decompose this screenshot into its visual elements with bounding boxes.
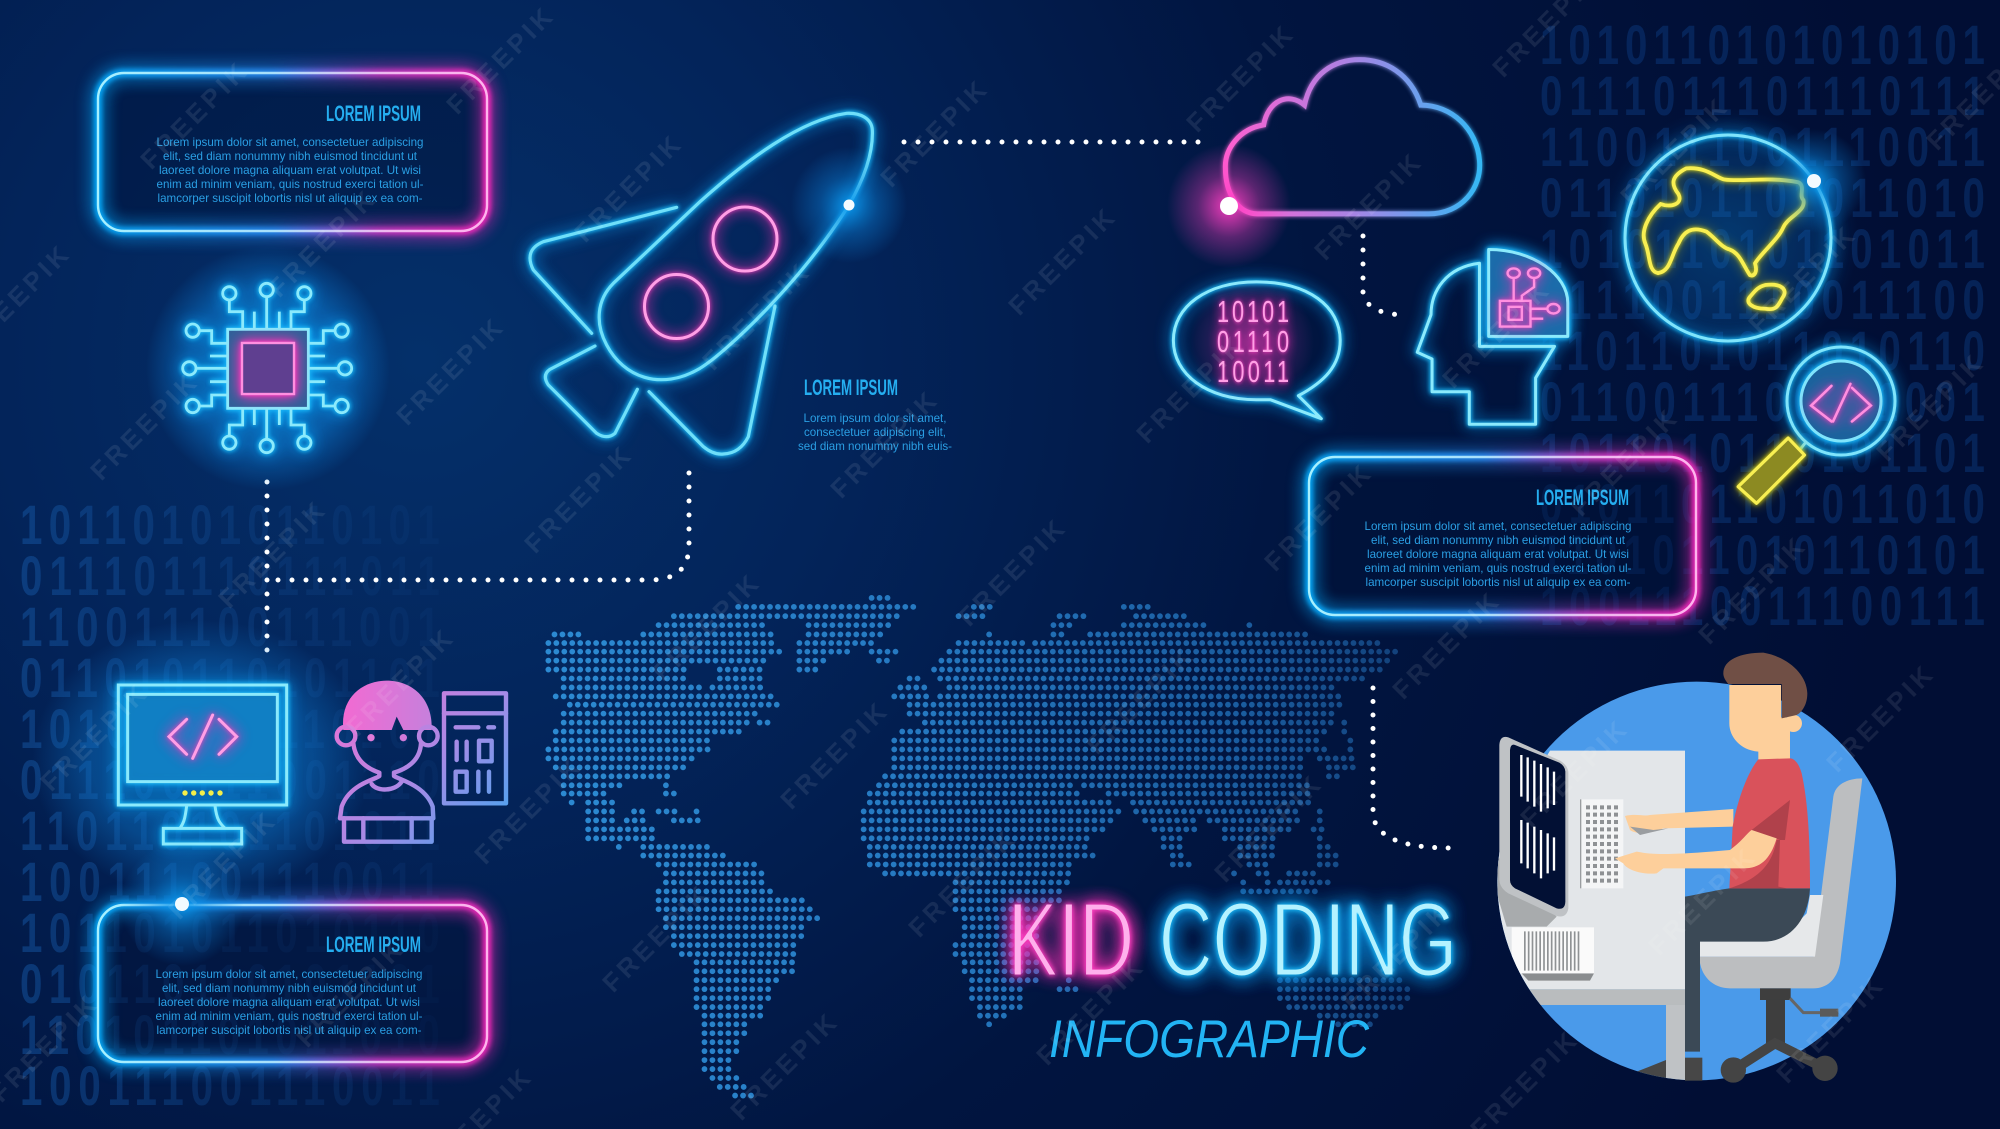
watermarks: FREEPIK [1030, 950, 1151, 1071]
icon: globe [1598, 108, 1866, 368]
binary pattern: lower left: 100111001110011 [20, 852, 440, 914]
panel: bottom left text box [98, 842, 487, 1062]
watermarks: FREEPIK [1436, 273, 1557, 394]
watermarks: FREEPIK [1870, 346, 1991, 467]
panel body text: lamcorper suscipit lobortis nisl ut aliquip ex ea com- [156, 1023, 422, 1037]
watermarks: FREEPIK [568, 127, 689, 248]
panel body text: lamcorper suscipit lobortis nisl ut aliquip ex ea com- [1366, 575, 1630, 589]
subtitle: INFOGRAPHIC: INFOGRAPHIC [1049, 1010, 1370, 1069]
icon: computer monitor [32, 620, 372, 900]
panel body text: Lorem ipsum dolor sit amet, consectetuer adipiscing [1364, 519, 1632, 533]
chair [1699, 778, 1862, 988]
panel heading: LOREM IPSUM [326, 932, 421, 957]
binary pattern: lower left: 101011010110101 [20, 699, 440, 761]
panel body text: enim ad minim veniam, quis nostrud exerci tation ul- [156, 177, 424, 191]
watermarks: FREEPIK [1386, 584, 1507, 705]
watermarks: FREEPIK [1080, 639, 1201, 760]
binary pattern: lower left: 011100111001110 [20, 750, 440, 812]
binary pattern: top right [1540, 15, 1985, 638]
spark [1762, 129, 1866, 233]
binary pattern: lower left: 110110101101011 [20, 801, 440, 863]
binary pattern: top right: 1001110011100111 [1540, 576, 1985, 638]
panel body text [156, 135, 424, 205]
panel body text: Lorem ipsum dolor sit amet, consectetuer adipiscing [156, 967, 422, 981]
watermarks: FREEPIK [1770, 968, 1891, 1089]
text: rocket label: consectetuer adipiscing elit, [804, 425, 946, 439]
watermarks: FREEPIK [824, 383, 945, 504]
binary pattern: top right: 0101101101011010 [1540, 474, 1985, 536]
watermarks: FREEPIK [902, 822, 1023, 943]
watermarks: FREEPIK [1308, 145, 1429, 266]
icon: speech bubble with binary [1173, 280, 1340, 419]
text: rocket label [798, 375, 952, 453]
shirt [1729, 758, 1810, 888]
watermarks: FREEPIK [212, 493, 333, 614]
title: KID CODING [1008, 881, 1457, 999]
watermarks: FREEPIK [468, 749, 589, 870]
watermarks: FREEPIK [1820, 657, 1941, 778]
watermarks: FREEPIK [1614, 90, 1735, 211]
watermarks: FREEPIK [84, 365, 205, 486]
blue circle [1497, 682, 1896, 1080]
front arm [1615, 830, 1777, 874]
watermarks: FREEPIK [1180, 17, 1301, 138]
watermarks: FREEPIK [646, 566, 767, 687]
panel body text: enim ad minim veniam, quis nostrud exerci tation ul- [156, 1009, 422, 1023]
binary pattern: top right: 0111001110011100 [1540, 270, 1985, 332]
title: KID CODING: CODING [1159, 881, 1457, 999]
binary pattern: top right: 0111011101110111 [1540, 66, 1985, 128]
panel body text: elit, sed diam nonummy nibh euismod tincidunt ut [162, 981, 417, 995]
watermarks: FREEPIK [696, 255, 817, 376]
watermarks: FREEPIK [874, 72, 995, 193]
binary pattern: lower left: 011101110111011 [20, 546, 440, 608]
panel: right text box [1309, 457, 1696, 615]
text: rocket label: LOREM IPSUM [804, 375, 898, 400]
icon: rocket [530, 113, 907, 454]
panel frame [98, 73, 487, 231]
computer monitor [1499, 737, 1568, 916]
panel body text: laoreet dolore magna aliquam erat volutpat. Ut wisi [1367, 547, 1629, 561]
binary pattern: top right: 0110101101011010 [1540, 168, 1985, 230]
illustration: person at computer [1483, 653, 1896, 1085]
trousers [1685, 888, 1810, 1052]
printer [1522, 973, 1594, 981]
back arm [1625, 809, 1733, 833]
binary pattern: top right: 0110011100111001 [1540, 372, 1985, 434]
watermarks: FREEPIK [1692, 529, 1813, 650]
watermarks: FREEPIK [34, 676, 155, 797]
watermarks: FREEPIK [724, 1005, 845, 1126]
icon: head with circuit [1417, 249, 1568, 424]
indicator dots [182, 790, 223, 796]
dotted world map [548, 598, 1415, 1096]
watermarks: FREEPIK [1564, 401, 1685, 522]
dotted connectors [267, 142, 1451, 848]
panel body text: elit, sed diam nonummy nibh euismod tincidunt ut [163, 149, 418, 163]
hair [1723, 653, 1807, 718]
watermarks: FREEPIK [440, 0, 561, 120]
watermarks: FREEPIK [1514, 712, 1635, 833]
watermarks: FREEPIK [1002, 200, 1123, 321]
panel body text: laoreet dolore magna aliquam erat volutpat. Ut wisi [158, 995, 420, 1009]
binary pattern: top right: 1010110101010101 [1540, 15, 1985, 77]
watermarks: FREEPIK [1336, 895, 1457, 1016]
desk [1483, 751, 1685, 1085]
spark [791, 147, 907, 263]
panel body text: enim ad minim veniam, quis nostrud exerci tation ul- [1364, 561, 1632, 575]
binary pattern: lower left: 101101010110101 [20, 495, 440, 557]
icon: speech bubble with binary: 10011 [1217, 354, 1289, 389]
binary pattern: lower left: 110011100111001 [20, 597, 440, 659]
watermarks: FREEPIK [596, 877, 717, 998]
binary pattern: lower left: 100111001110011 [20, 1056, 440, 1118]
binary pattern: top right: 1101101011010110 [1540, 321, 1985, 383]
panel body text: elit, sed diam nonummy nibh euismod tincidunt ut [1371, 533, 1626, 547]
binary pattern: lower left: 011010110101101 [20, 648, 440, 710]
panel body text: Lorem ipsum dolor sit amet, consectetuer adipiscing [156, 135, 424, 149]
watermarks: FREEPIK [774, 694, 895, 815]
panel frame [1309, 457, 1696, 615]
binary pattern: top right: 1010110101101011 [1540, 219, 1985, 281]
panel: top left text box [98, 73, 487, 231]
binary pattern: lower left: 010110110101101 [20, 954, 440, 1016]
icon: speech bubble with binary: 10101 [1217, 294, 1289, 329]
panel body text: lamcorper suscipit lobortis nisl ut aliquip ex ea com- [158, 191, 422, 205]
panel frame [98, 905, 487, 1062]
watermarks: FREEPIK [290, 932, 411, 1053]
binary pattern: lower left [20, 495, 440, 1118]
panel heading: LOREM IPSUM [1536, 485, 1629, 510]
binary pattern: lower left: 101101011010110 [20, 903, 440, 965]
watermarks: FREEPIK [340, 621, 461, 742]
panel body text [1364, 519, 1632, 589]
watermarks: FREEPIK [1208, 767, 1329, 888]
text: rocket label: Lorem ipsum dolor sit amet, [804, 411, 946, 425]
watermarks: FREEPIK [390, 310, 511, 431]
watermarks: FREEPIK [162, 804, 283, 925]
head and neck [1729, 685, 1790, 763]
icon: magnifying glass [1738, 347, 1895, 503]
panel body text [156, 967, 422, 1037]
watermarks: FREEPIK [262, 182, 383, 303]
spark [1167, 144, 1291, 268]
spark [120, 842, 244, 966]
icon: cloud [1167, 60, 1480, 268]
watermarks: FREEPIK [1642, 840, 1763, 961]
icon: chip [146, 246, 390, 490]
watermarks: FREEPIK [1130, 328, 1251, 449]
binary pattern: lower left: 110101101011010 [20, 1005, 440, 1067]
watermarks: FREEPIK [1742, 218, 1863, 339]
text: rocket label: sed diam nonummy nibh euis- [798, 439, 952, 453]
icon: speech bubble with binary: 01110 [1217, 324, 1289, 359]
watermarks: FREEPIK [518, 438, 639, 559]
watermarks: FREEPIK [134, 54, 255, 175]
keyboard [1580, 799, 1623, 888]
icon: kid with calculator [337, 681, 506, 842]
binary pattern: top right: 1101011010110101 [1540, 525, 1985, 587]
watermarks: FREEPIK [952, 511, 1073, 632]
watermarks: FREEPIK [1258, 456, 1379, 577]
binary pattern: top right: 1011010110101101 [1540, 423, 1985, 485]
panel body text: laoreet dolore magna aliquam erat volutpat. Ut wisi [159, 163, 421, 177]
title: KID CODING: KID [1008, 881, 1134, 999]
binary pattern: top right: 1100111001110011 [1540, 117, 1985, 179]
panel heading: LOREM IPSUM [326, 101, 421, 126]
